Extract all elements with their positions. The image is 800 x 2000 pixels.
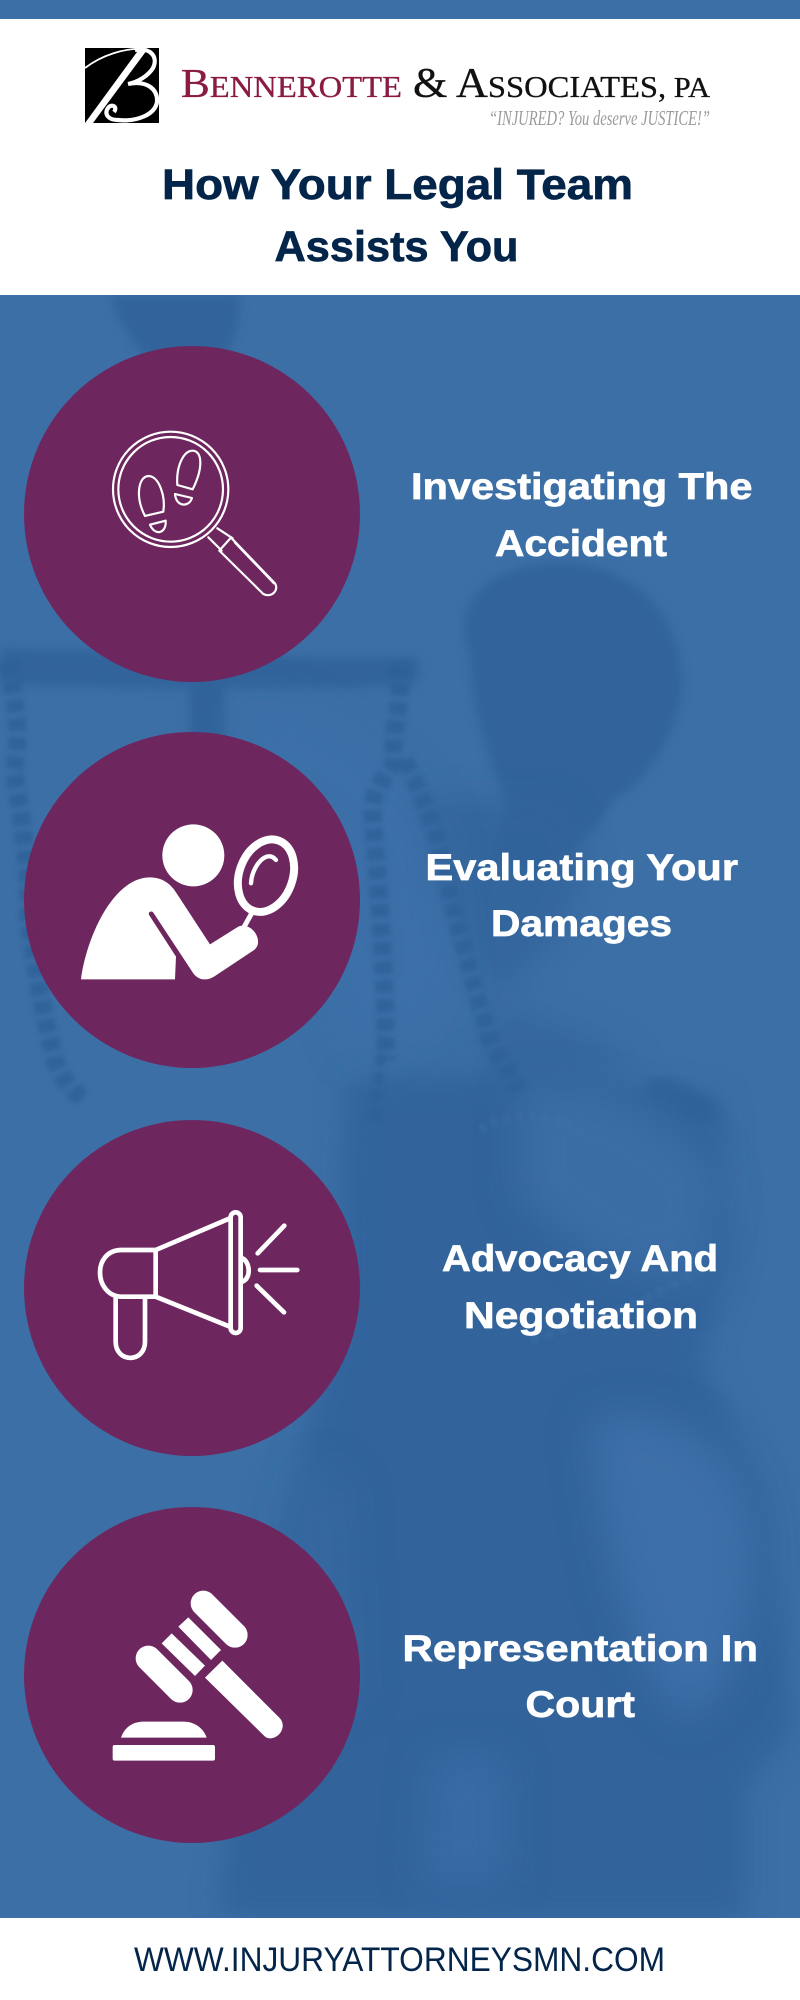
- icon: megaphone: [100, 1212, 297, 1358]
- icon: gavel: [113, 1603, 283, 1761]
- logo mark: black square with monogram: [85, 48, 159, 123]
- icon: person with magnifying glass: [81, 824, 304, 979]
- step 4 label: Court: [526, 1684, 635, 1725]
- step 2 label: Damages: [491, 903, 672, 944]
- logo: firm mark and name: [85, 48, 710, 130]
- step 1 circle: [24, 346, 360, 682]
- title: Assists You: [274, 223, 518, 271]
- step 3 label: [442, 1238, 718, 1336]
- step 2 label: Evaluating Your: [426, 847, 738, 888]
- step 1 label: Accident: [495, 523, 667, 564]
- logo: firm mark and name: & ASSOCIATES, PA: [413, 61, 710, 107]
- icon: magnifier over footprints: [113, 432, 276, 595]
- footer: white band: [0, 1918, 800, 2000]
- logo: tagline: “INJURED? You deserve JUSTICE!”: [489, 106, 710, 130]
- step 1 label: [411, 466, 752, 564]
- step 3 circle: [24, 1120, 360, 1456]
- title: How Your Legal Team: [162, 161, 633, 209]
- header: white panel: [0, 19, 800, 295]
- step 1 label: Investigating The: [411, 466, 752, 507]
- title: [162, 161, 633, 271]
- step 4 circle: [24, 1507, 360, 1843]
- step 2 label: [426, 847, 738, 944]
- logo: firm name: BENNEROTTE: [181, 60, 402, 106]
- step 4 label: [402, 1628, 758, 1725]
- step 4 label: Representation In: [402, 1628, 758, 1669]
- step 3 label: Advocacy And: [442, 1238, 718, 1279]
- step 3 label: Negotiation: [464, 1295, 698, 1336]
- footer website text: WWW.INJURYATTORNEYSMN.COM: [134, 1941, 665, 1979]
- step 2 circle: [24, 732, 360, 1068]
